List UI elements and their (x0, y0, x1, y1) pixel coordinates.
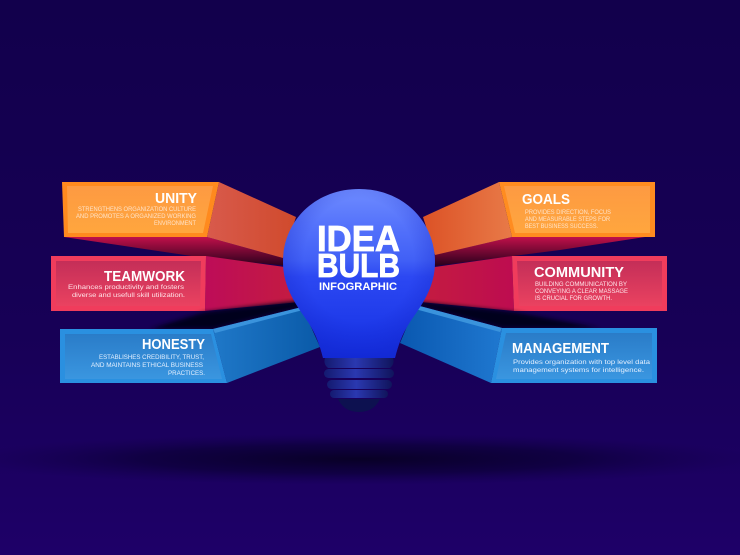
title: bulb: BULB (317, 247, 400, 284)
panel: goals (423, 182, 655, 266)
text: unity description: AND PROMOTES A ORGANIZED WORKING (76, 213, 196, 220)
text: honesty description: ESTABLISHES CREDIBILITY, TRUST, (99, 354, 204, 361)
panel: teamwork (51, 256, 300, 311)
text: management description: management systems for intelligence. (513, 367, 644, 374)
panel: community (420, 256, 667, 311)
text: teamwork description: diverse and usefull skill utilization. (72, 292, 185, 299)
text: honesty description (91, 354, 205, 377)
heading: unity: UNITY (155, 191, 197, 207)
text: management description: Provides organization with top level data (513, 359, 650, 366)
heading: community: COMMUNITY (534, 265, 624, 281)
heading: honesty: HONESTY (142, 337, 205, 353)
shadow under teamwork (150, 301, 302, 329)
text: goals description: PROVIDES DIRECTION, FOCUS (525, 209, 611, 216)
text: teamwork description: Enhances productivity and fosters (68, 284, 185, 291)
shadow under community (416, 302, 600, 328)
subtitle: infographic: INFOGRAPHIC (319, 281, 397, 293)
title: idea: IDEA (317, 218, 400, 259)
text: unity description: STRENGTHENS ORGANIZATION CULTURE (78, 206, 196, 213)
heading: teamwork: TEAMWORK (104, 269, 185, 285)
text: community description (535, 281, 629, 302)
heading: management: MANAGEMENT (512, 341, 609, 357)
text: goals description (525, 209, 611, 230)
text: community description: BUILDING COMMUNICATION BY (535, 281, 628, 288)
text: goals description: AND MEASURABLE STEPS FOR (525, 216, 610, 223)
bulb glass (283, 189, 435, 358)
text: honesty description: AND MAINTAINS ETHICAL BUSINESS (91, 362, 204, 369)
heading: goals: GOALS (522, 192, 570, 208)
text: community description: IS CRUCIAL FOR GROWTH. (535, 295, 612, 302)
icon: light bulb (283, 189, 435, 412)
text: honesty description: PRACTICES. (168, 370, 205, 377)
panel: honesty (60, 307, 320, 383)
panel: unity (62, 182, 296, 266)
text: teamwork description (68, 284, 185, 299)
panel: management (400, 305, 657, 383)
text: unity description (76, 206, 196, 227)
text: management description (513, 359, 650, 374)
text: unity description: ENVIRONMENT (154, 220, 196, 227)
floor shadow (0, 433, 740, 485)
text: goals description: BEST BUSINESS SUCCESS. (525, 223, 598, 230)
bulb screw base (324, 358, 394, 412)
text: community description: CONVEYING A CLEAR MASSAGE (535, 288, 629, 295)
